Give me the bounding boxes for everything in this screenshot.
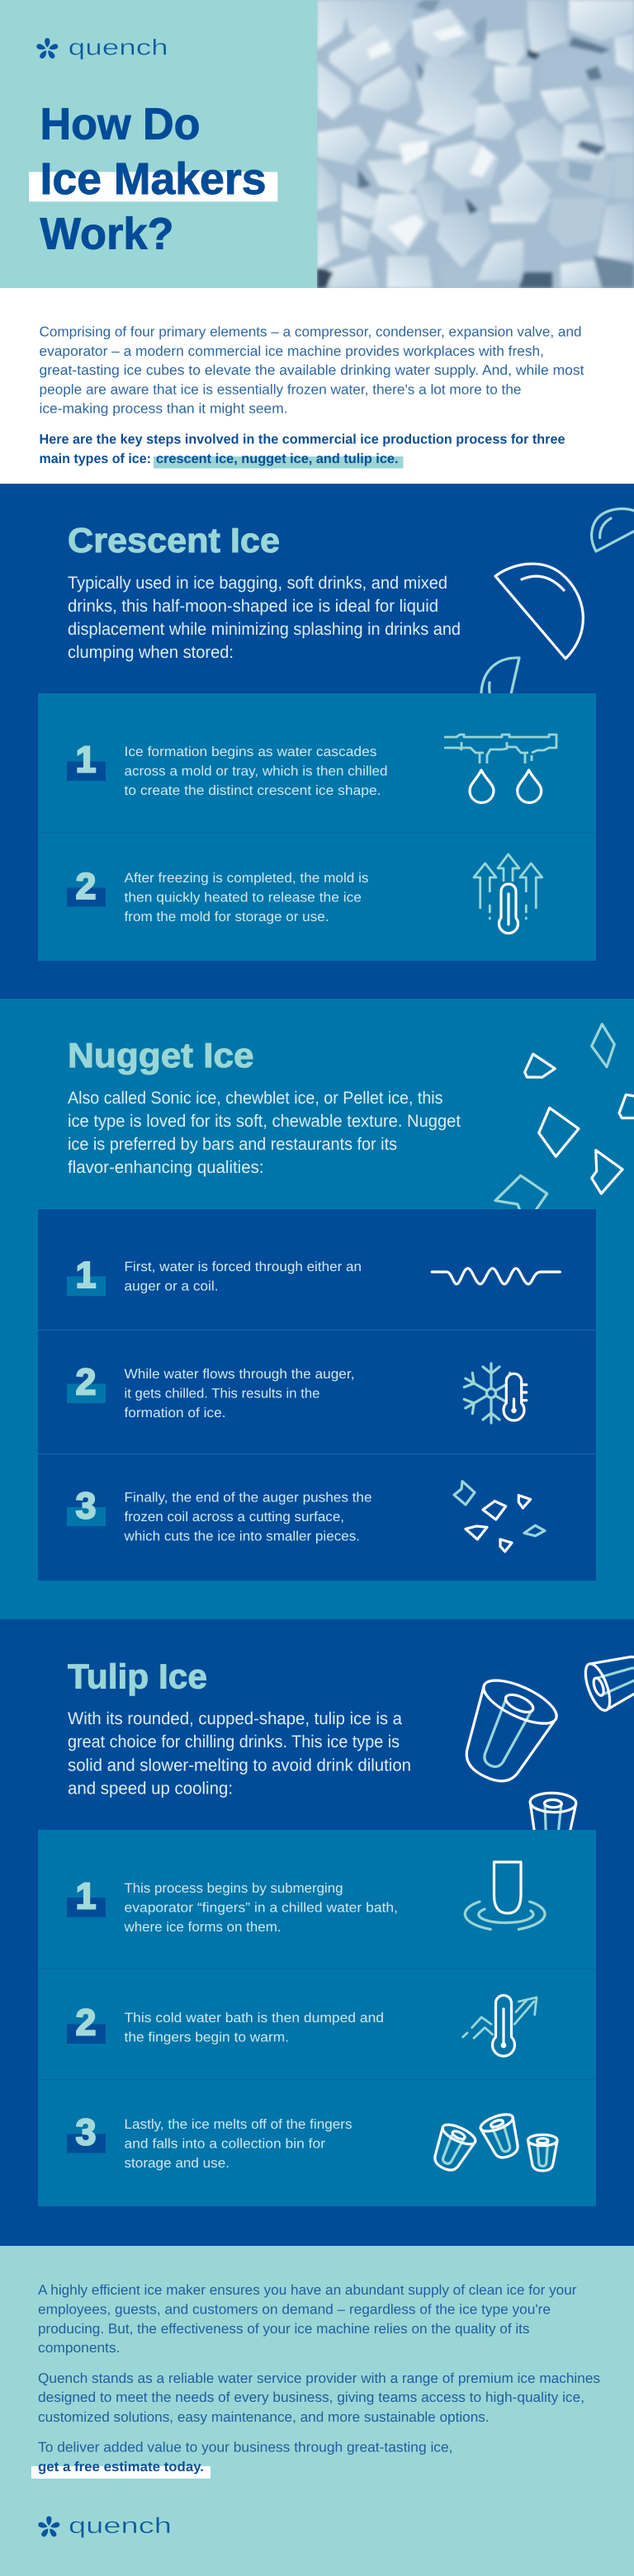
panel: hero — [0, 0, 634, 288]
icon: finger in water bath — [465, 1862, 545, 1930]
icon: lower tulip cup — [528, 1792, 576, 1851]
description: drinks, this half-moon-shaped ice is ideal for liquid — [68, 597, 438, 616]
step 3 — [67, 1482, 545, 1552]
step text: auger or a coil. — [124, 1279, 218, 1294]
key steps statement: crescent ice, nugget ice, and tulip ice. — [156, 451, 398, 466]
closing paragraph 2: Quench stands as a reliable water service provider with a range of premium ice machines — [38, 2370, 600, 2386]
step text: across a mold or tray, which is then chilled — [124, 764, 388, 779]
step text: it gets chilled. This results in the — [124, 1387, 320, 1401]
panel: tulip ice — [0, 1619, 634, 2246]
number block — [67, 888, 106, 906]
title: Ice Makers — [40, 154, 266, 204]
description: Typically used in ice bagging, soft drinks, and mixed — [68, 574, 447, 593]
intro paragraph: evaporator – a modern commercial ice machine provides workplaces with fresh, — [40, 343, 544, 359]
section background — [0, 484, 634, 999]
step text: and falls into a collection bin for — [124, 2136, 326, 2151]
description: displacement while minimizing splashing in drinks and — [68, 620, 461, 639]
heading: Tulip Ice — [68, 1657, 207, 1696]
description: and speed up cooling: — [68, 1780, 233, 1798]
number block — [67, 1507, 106, 1526]
icon: snowflake and thermometer — [461, 1364, 527, 1423]
description — [68, 574, 461, 662]
divider — [38, 1453, 596, 1454]
description: flavor-enhancing qualities: — [68, 1158, 264, 1177]
logo wordmark: quench — [69, 35, 168, 60]
closing paragraph 2 — [38, 2370, 600, 2425]
step text: the fingers begin to warm. — [124, 2030, 289, 2045]
icon: mold with drops — [444, 735, 556, 802]
description: great choice for chilling drinks. This ice type is — [68, 1732, 400, 1751]
number block — [67, 761, 106, 781]
description: With its rounded, cupped-shape, tulip ice is a — [68, 1709, 402, 1728]
highlight bar — [154, 456, 403, 469]
step text — [123, 1491, 371, 1543]
hero photo: crushed ice — [317, 0, 634, 288]
icon: lower crescent — [481, 658, 519, 697]
step text: formation of ice. — [124, 1406, 226, 1420]
closing paragraph 2: designed to meet the needs of every business, giving teams access to high-quality ice, — [38, 2389, 584, 2405]
panel: nugget ice — [0, 999, 634, 1619]
logo: quench — [35, 35, 168, 60]
step text — [124, 871, 368, 924]
step text: First, water is forced through either an — [124, 1260, 362, 1274]
number: 2 — [75, 2001, 97, 2044]
icon: three tulip cubes — [427, 2111, 557, 2176]
intro paragraph — [40, 324, 584, 417]
key steps statement: main types of ice: — [40, 451, 151, 466]
title — [40, 99, 266, 259]
step 3 — [67, 2111, 557, 2176]
call to action highlight — [31, 2466, 211, 2479]
number: 3 — [75, 1484, 97, 1527]
number block — [67, 1383, 106, 1403]
number block — [67, 2134, 106, 2153]
step text: then quickly heated to release the ice — [124, 890, 362, 905]
divider — [38, 832, 596, 834]
intro paragraph: ice-making process than it might seem. — [40, 401, 287, 417]
step text: frozen coil across a cutting surface, — [124, 1510, 344, 1524]
section background — [0, 1619, 634, 2246]
logo wordmark: quench — [69, 2513, 172, 2538]
key steps statement: Here are the key steps involved in the commercial ice production process for three — [40, 432, 565, 447]
step 2 — [67, 1996, 537, 2056]
number: 1 — [75, 738, 97, 781]
step text: This process begins by submerging — [124, 1881, 343, 1896]
step 1 — [67, 1254, 560, 1296]
step text: Ice formation begins as water cascades — [124, 744, 376, 759]
closing paragraph 2: customized solutions, easy maintenance, and more sustainable options. — [38, 2409, 490, 2425]
step text: Finally, the end of the auger pushes the — [124, 1491, 371, 1505]
icon: flower mark — [35, 38, 59, 59]
icon: small ice pieces — [454, 1482, 545, 1552]
logo: quench — [37, 2513, 172, 2538]
footer background — [0, 2246, 634, 2576]
icon: large crescent — [495, 564, 583, 659]
icon: ice nuggets — [495, 1024, 634, 1215]
description: clumping when stored: — [68, 643, 234, 662]
hero teal background — [0, 0, 317, 288]
panel: crescent ice — [0, 484, 634, 999]
closing paragraph 1: components. — [38, 2340, 121, 2356]
description — [68, 1089, 461, 1177]
description: solid and slower-melting to avoid drink dilution — [68, 1756, 411, 1775]
icon: top-right crescent — [592, 508, 634, 551]
steps panel — [38, 693, 596, 961]
step text: from the mold for storage or use. — [124, 910, 329, 924]
closing paragraph 1 — [38, 2282, 577, 2356]
number: 2 — [75, 865, 97, 907]
description: Also called Sonic ice, chewblet ice, or Pellet ice, this — [68, 1089, 442, 1108]
panel: introduction — [0, 288, 634, 484]
step text — [124, 744, 388, 798]
step text: which cuts the ice into smaller pieces. — [123, 1529, 360, 1543]
number: 3 — [75, 2111, 97, 2153]
step 1 — [67, 735, 556, 802]
number block — [67, 1898, 106, 1917]
icon: large tulip cup — [449, 1671, 562, 1794]
step text: After freezing is completed, the mold is — [124, 871, 368, 886]
section background — [0, 999, 634, 1619]
icon: warming thermometer — [463, 1996, 537, 2056]
step text — [124, 1367, 355, 1420]
step 2 — [67, 1360, 527, 1423]
number block — [67, 2024, 106, 2044]
step text: evaporator “fingers” in a chilled water bath, — [124, 1900, 398, 1915]
number: 1 — [75, 1875, 97, 1917]
title: How Do — [40, 99, 200, 149]
heading: Nugget Ice — [68, 1036, 254, 1075]
step text: storage and use. — [124, 2156, 229, 2171]
intro paragraph: great-tasting ice cubes to elevate the available drinking water supply. And, while most — [40, 362, 584, 378]
step text — [124, 2117, 352, 2171]
number block — [67, 1276, 106, 1296]
description: ice type is loved for its soft, chewable texture. Nugget — [68, 1112, 461, 1131]
icon: flower mark — [37, 2516, 60, 2538]
intro paragraph: people are aware that ice is essentially frozen water, there's a lot more to the — [40, 381, 522, 397]
closing paragraph 3: To deliver added value to your business through great-tasting ice, — [38, 2440, 452, 2455]
closing paragraph 1: producing. But, the effectiveness of your ice machine relies on the quality of its — [38, 2321, 530, 2337]
intro background — [0, 288, 634, 484]
icon: heat arrows and thermometer — [474, 854, 542, 934]
step text — [124, 1260, 362, 1294]
title highlight bar — [29, 172, 277, 201]
step text: This cold water bath is then dumped and — [124, 2011, 384, 2025]
number: 2 — [75, 1360, 97, 1403]
key steps statement — [40, 432, 565, 466]
step text — [123, 1881, 398, 1935]
closing paragraph 1: employees, guests, and customers on demand – regardless of the ice type you're — [38, 2301, 551, 2318]
step text: where ice forms on them. — [123, 1920, 281, 1935]
step text — [124, 2011, 384, 2045]
intro paragraph: Comprising of four primary elements – a compressor, condenser, expansion valve, and — [40, 324, 581, 340]
step 2 — [67, 854, 542, 934]
step 1 — [67, 1862, 545, 1935]
panel: closing — [0, 2246, 634, 2576]
step text: Lastly, the ice melts off of the fingers — [124, 2117, 352, 2132]
steps panel — [38, 1830, 596, 2206]
step text: While water flows through the auger, — [124, 1367, 355, 1382]
description: ice is preferred by bars and restaurants for its — [68, 1135, 397, 1154]
divider — [38, 2079, 596, 2080]
icon: coil — [432, 1269, 560, 1284]
steps panel — [38, 1209, 596, 1581]
divider — [38, 1330, 596, 1331]
step text: to create the distinct crescent ice shape. — [124, 783, 381, 798]
call to action: get a free estimate today. — [38, 2460, 204, 2474]
closing paragraph 1: A highly efficient ice maker ensures you have an abundant supply of clean ice for your — [38, 2282, 577, 2298]
heading: Crescent Ice — [68, 521, 280, 560]
description — [68, 1709, 411, 1798]
icon: top-right tulip cup — [580, 1647, 634, 1713]
number: 1 — [75, 1254, 97, 1296]
title: Work? — [40, 210, 173, 259]
